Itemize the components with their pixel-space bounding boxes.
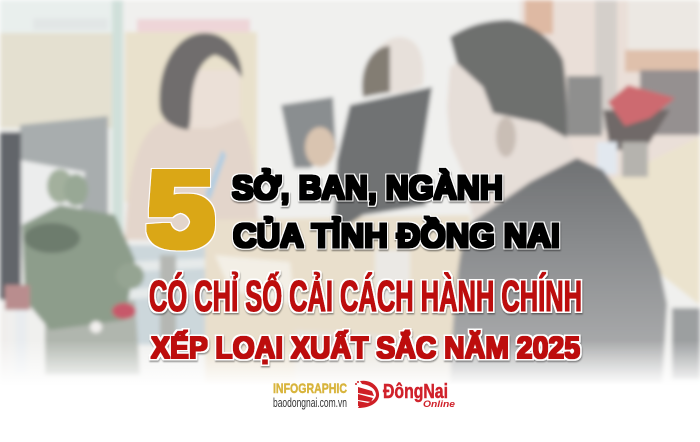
logo icon	[355, 381, 379, 408]
label: infographic: INFOGRAPHIC	[273, 380, 347, 396]
heading: của tỉnh Đồng Nai: CỦA TỈNH ĐỒNG NAI	[233, 217, 560, 254]
desk, books and papers	[125, 215, 480, 385]
logo tagline: Online	[423, 399, 455, 409]
left room behind glass	[0, 0, 123, 300]
bottom fade to white	[0, 340, 700, 386]
central monitor	[333, 87, 432, 235]
numeral 5: 5	[146, 149, 215, 269]
website address: baodongnai.com.vn	[273, 395, 347, 410]
heading: sở, ban, ngành: SỞ, BAN, NGÀNH	[232, 169, 503, 206]
woman clerk	[125, 33, 258, 240]
rear monitors and chair	[0, 97, 336, 300]
cabinet	[125, 19, 257, 202]
logo: Đồng Nai Online	[355, 381, 455, 409]
heading: xếp loại xuất sắc năm 2025: XẾP LOẠI XUẤT SẮC NĂM 2025	[151, 329, 580, 365]
right side wall and desk	[520, 0, 700, 380]
man customer	[447, 20, 667, 385]
logo wordmark: ĐôngNai	[383, 381, 448, 403]
potted plant	[0, 169, 144, 375]
second woman in background	[362, 37, 424, 97]
